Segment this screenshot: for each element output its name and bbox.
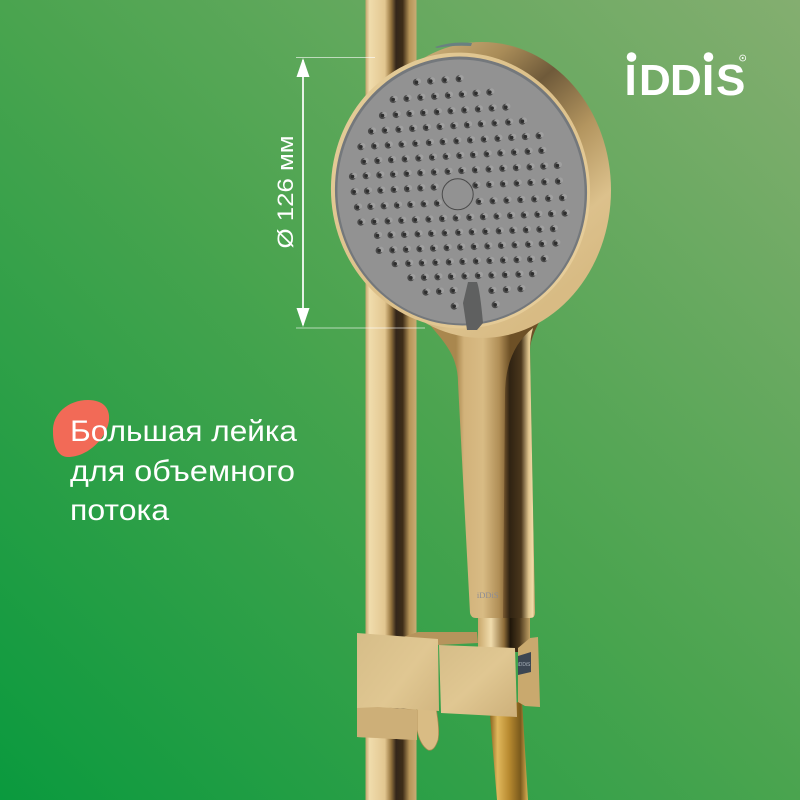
hose clip plate (518, 637, 540, 707)
dimension line with arrows (296, 58, 310, 327)
heading text: Большая лейка (70, 415, 297, 448)
centre button (442, 179, 473, 210)
lower clamp band (357, 707, 417, 740)
right clamp block (439, 645, 517, 717)
shower head (319, 42, 611, 339)
hose (490, 700, 528, 800)
handle body (420, 303, 550, 618)
head back shell (353, 42, 611, 338)
spray nozzles (352, 78, 567, 306)
mode selector lever (463, 282, 483, 330)
dimension label: Ø 126 мм (273, 136, 298, 248)
logo: IDDIS (624, 56, 745, 105)
registered mark (740, 55, 746, 61)
heading text: для объемного (70, 455, 295, 488)
red accent blob (53, 400, 109, 457)
grey spray face (324, 46, 598, 336)
clip label (518, 652, 531, 675)
hand shower neck (478, 612, 530, 652)
clip label: iDDiS (518, 662, 531, 668)
heading text: потока (70, 494, 169, 527)
left clamp block (357, 633, 439, 740)
handle dark ridge (503, 328, 535, 618)
shower rod (366, 0, 416, 800)
wall bracket (357, 632, 540, 750)
dimension marker (273, 58, 425, 328)
head front rim (319, 42, 602, 339)
heading text (70, 415, 297, 527)
extension lines (296, 58, 425, 328)
bracket top surface (400, 632, 478, 645)
hand shower handle (420, 303, 550, 618)
handle logo: iDDiS (477, 590, 499, 600)
top button (435, 42, 472, 48)
pull lever (417, 708, 439, 750)
